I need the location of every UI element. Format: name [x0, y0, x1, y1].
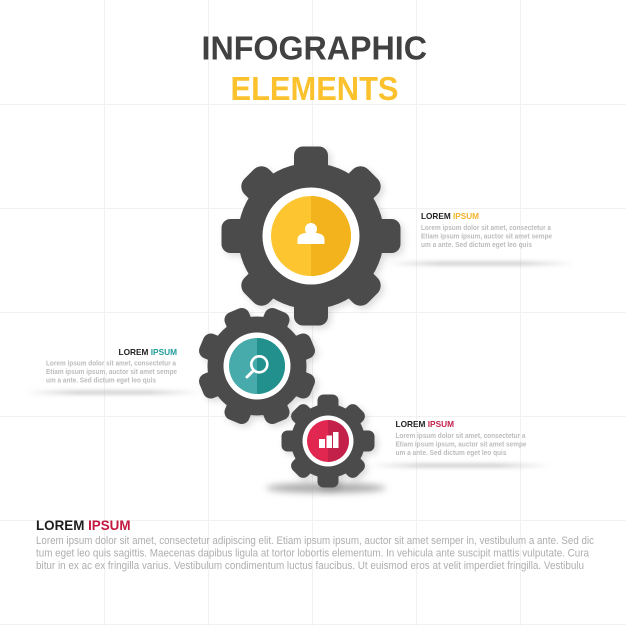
callout: top right: Etiam ipsum ipsum, auctor sit amet sempe — [421, 234, 552, 240]
text block: bottom: tum eget leo quis sagittis. Maecenas dapibus ligula at tortor lobortis elementum. In vehicula ante suscipit mattis vulputate. Cura — [36, 548, 589, 560]
callout: top right: Lorem ipsum dolor sit amet, consectetur a — [421, 225, 551, 232]
callout: bottom right: LOREM IPSUM — [396, 419, 454, 429]
callout: middle left — [46, 347, 177, 384]
title: INFOGRAPHIC — [202, 30, 427, 66]
callout shadow: bottom — [370, 464, 550, 467]
ground shadow — [266, 483, 386, 493]
text block: bottom: LOREM IPSUM — [36, 517, 130, 533]
icon: magnifier — [247, 356, 267, 377]
callout: top right — [421, 211, 552, 249]
text block: bottom: bitur in ex ac ex fringilla varius. Vestibulum condimentum luctus faucibus. Ut euismod eros at velit imperdiet fringilla. Vestibulu — [36, 560, 584, 572]
callout: middle left: um a ante. Sed dictum eget leo quis — [46, 378, 156, 384]
callout: bottom right: Lorem ipsum dolor sit amet, consectetur a — [396, 433, 526, 440]
gear: medium teal — [179, 288, 335, 444]
callout: middle left: Lorem ipsum dolor sit amet, consectetur a — [46, 360, 176, 368]
icon: person — [298, 223, 324, 244]
callout: middle left: LOREM IPSUM — [118, 347, 177, 357]
text block: bottom — [36, 517, 595, 572]
callout: top right: um a ante. Sed dictum eget leo quis — [421, 242, 532, 249]
callout: bottom right — [396, 419, 527, 457]
gear: large yellow — [222, 146, 400, 326]
callout: bottom right: Etiam ipsum ipsum, auctor sit amet sempe — [396, 442, 527, 448]
callout: bottom right: um a ante. Sed dictum eget leo quis — [396, 450, 507, 457]
callout: top right: LOREM IPSUM — [421, 211, 479, 221]
callout: middle left: Etiam ipsum ipsum, auctor sit amet sempe — [46, 369, 177, 376]
gear: small red — [282, 394, 374, 488]
title — [202, 30, 427, 107]
title: ELEMENTS — [230, 70, 398, 107]
icon: bar chart — [319, 432, 338, 448]
callout shadow: top — [385, 262, 575, 265]
callout shadow: middle — [25, 391, 200, 394]
